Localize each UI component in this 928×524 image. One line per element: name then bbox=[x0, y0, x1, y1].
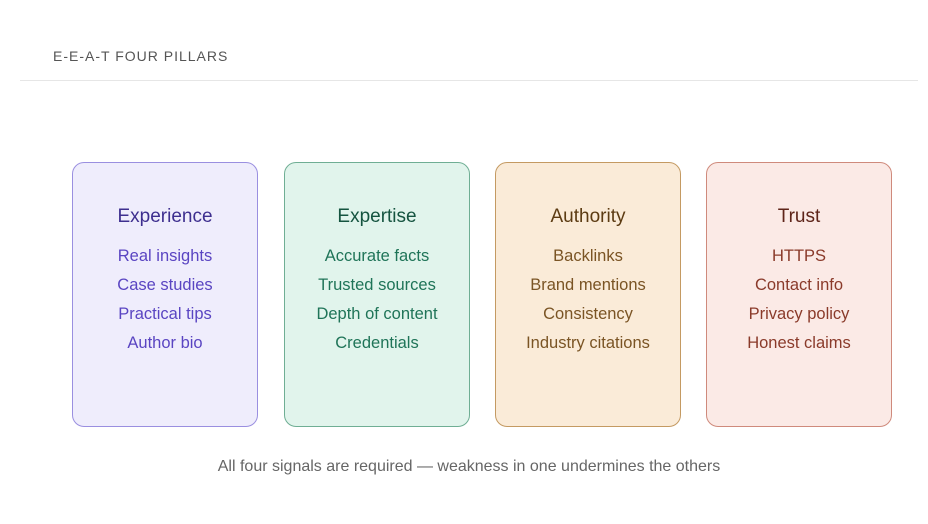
footer note: All four signals are required — weakness in one undermines the others bbox=[218, 458, 720, 475]
list: trust items: Privacy policy bbox=[749, 305, 849, 323]
list: authority items: Consistency bbox=[543, 305, 633, 323]
list: trust items: Honest claims bbox=[747, 334, 851, 352]
heading: authority: Authority bbox=[550, 206, 625, 227]
list: authority items: Brand mentions bbox=[530, 276, 646, 294]
list: expertise items: Accurate facts bbox=[325, 247, 429, 265]
list: trust items: Contact info bbox=[755, 276, 843, 294]
list: experience items: Real insights bbox=[118, 247, 212, 265]
heading: trust: Trust bbox=[778, 206, 820, 227]
list: expertise items: Depth of content bbox=[316, 305, 438, 323]
list: expertise items bbox=[316, 247, 438, 352]
list: expertise items: Trusted sources bbox=[318, 276, 436, 294]
panel: authority bbox=[495, 162, 681, 427]
heading: expertise: Expertise bbox=[337, 206, 417, 227]
panel: experience bbox=[72, 162, 258, 427]
list: experience items: Author bio bbox=[127, 334, 203, 352]
list: experience items: Case studies bbox=[117, 276, 213, 294]
heading: experience: Experience bbox=[117, 206, 213, 227]
list: expertise items: Credentials bbox=[335, 334, 419, 352]
list: authority items bbox=[526, 247, 650, 352]
list: authority items: Backlinks bbox=[553, 247, 623, 265]
title: E-E-A-T FOUR PILLARS bbox=[53, 48, 228, 64]
list: authority items: Industry citations bbox=[526, 334, 650, 352]
list: trust items: HTTPS bbox=[772, 247, 826, 265]
panel: trust bbox=[706, 162, 892, 427]
panel: expertise bbox=[284, 162, 470, 427]
list: experience items: Practical tips bbox=[118, 305, 212, 323]
list: experience items bbox=[117, 247, 213, 352]
list: trust items bbox=[747, 247, 851, 352]
